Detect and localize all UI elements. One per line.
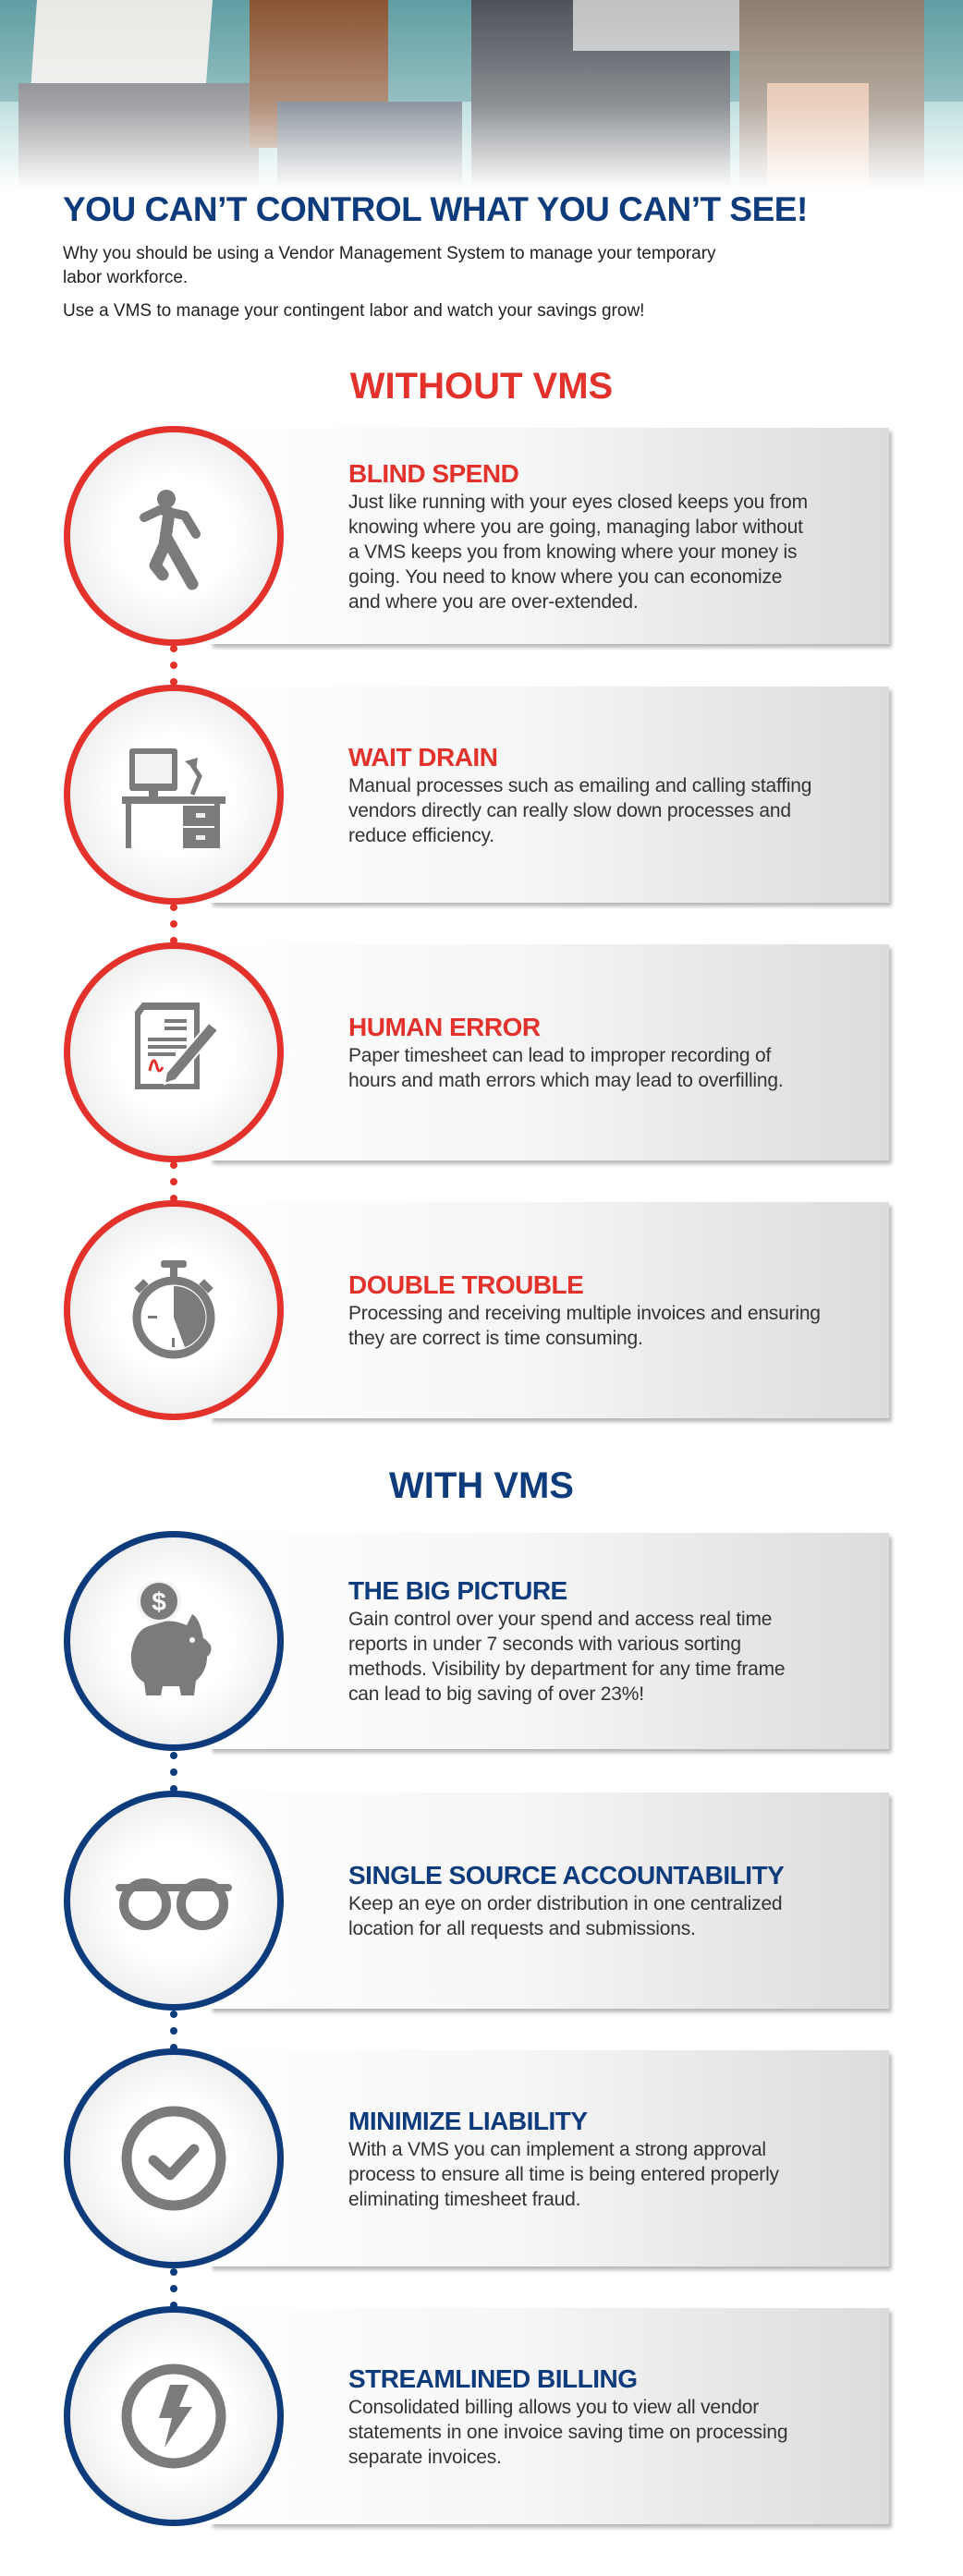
panel: big picture: can lead to big saving of over 23%! xyxy=(348,1683,644,1705)
panel: wait drain: reduce efficiency. xyxy=(348,824,494,846)
panel: minimize liability xyxy=(210,2050,889,2266)
header photo xyxy=(0,0,963,183)
panel: double trouble: DOUBLE TROUBLE xyxy=(348,1270,583,1299)
panel: double trouble xyxy=(210,1202,889,1418)
panel: blind spend: going. You need to know where you can economize xyxy=(348,565,782,588)
panel: streamlined billing: STREAMLINED BILLING xyxy=(348,2363,638,2393)
connector dots xyxy=(170,904,177,942)
panel: minimize liability: With a VMS you can implement a strong approval xyxy=(348,2138,766,2160)
connector dots xyxy=(170,1752,177,1791)
title: YOU CAN’T CONTROL WHAT YOU CAN’T SEE! xyxy=(63,190,808,228)
panel: minimize liability: eliminating timesheet fraud. xyxy=(348,2188,580,2210)
heading: with VMS: WITH VMS xyxy=(389,1465,574,1506)
icon: lightning circle xyxy=(64,2306,284,2526)
connector dots xyxy=(170,2011,177,2049)
icon: desk xyxy=(64,685,284,905)
panel: wait drain: WAIT DRAIN xyxy=(348,743,497,771)
panel: big picture: Gain control over your spend and access real time xyxy=(348,1609,772,1630)
panel: double trouble: Processing and receiving multiple invoices and ensuring xyxy=(348,1303,821,1324)
panel: human error: HUMAN ERROR xyxy=(348,1013,541,1041)
intro text: Use a VMS to manage your contingent labor and watch your savings grow! xyxy=(63,301,644,321)
panel: blind spend xyxy=(210,428,889,644)
panel: streamlined billing: statements in one invoice saving time on processing xyxy=(348,2421,787,2443)
panel: blind spend: and where you are over-extended. xyxy=(348,591,638,612)
panel: wait drain: vendors directly can really slow down processes and xyxy=(348,800,791,820)
panel: human error: Paper timesheet can lead to improper recording of xyxy=(348,1045,771,1066)
panel: big picture: methods. Visibility by department for any time frame xyxy=(348,1659,785,1680)
panel: big picture: THE BIG PICTURE xyxy=(348,1576,567,1605)
panel: wait drain: Manual processes such as emailing and calling staffing xyxy=(348,774,811,796)
panel: big picture xyxy=(210,1533,889,1749)
panel: double trouble: they are correct is time consuming. xyxy=(348,1328,643,1349)
heading: without VMS: WITHOUT VMS xyxy=(350,366,613,407)
icon: stopwatch xyxy=(64,1200,284,1420)
intro text: labor workforce. xyxy=(63,268,188,287)
panel: blind spend: BLIND SPEND xyxy=(348,458,518,488)
panel: big picture: reports in under 7 seconds with various sorting xyxy=(348,1634,741,1655)
connector dots xyxy=(170,645,177,686)
icon: check circle xyxy=(64,2048,284,2268)
icon: glasses xyxy=(64,1791,284,2011)
panel: single source: location for all requests and submissions. xyxy=(348,1918,696,1939)
connector dots xyxy=(170,2268,177,2306)
icon: piggy bank: $ xyxy=(152,1587,166,1616)
icon: running man xyxy=(64,426,284,646)
panel: minimize liability: MINIMIZE LIABILITY xyxy=(348,2107,588,2134)
connector dots xyxy=(170,1162,177,1201)
panel: blind spend: a VMS keeps you from knowing where your money is xyxy=(348,541,797,562)
panel: streamlined billing xyxy=(210,2308,889,2524)
panel: single source xyxy=(210,1792,889,2009)
icon: piggy bank xyxy=(64,1531,284,1751)
panel: single source: Keep an eye on order distribution in one centralized xyxy=(348,1893,782,1914)
panel: single source: SINGLE SOURCE ACCOUNTABILITY xyxy=(348,1861,784,1889)
panel: human error xyxy=(210,944,889,1160)
panel: blind spend: knowing where you are going, managing labor without xyxy=(348,516,803,538)
panel: wait drain xyxy=(210,687,889,903)
panel: minimize liability: process to ensure all time is being entered properly xyxy=(348,2164,779,2184)
intro text xyxy=(63,244,716,321)
panel: streamlined billing: separate invoices. xyxy=(348,2447,502,2467)
panel: human error: hours and math errors which may lead to overfilling. xyxy=(348,1070,784,1091)
icon: signed document xyxy=(64,942,284,1162)
panel: streamlined billing: Consolidated billing allows you to view all vendor xyxy=(348,2397,759,2417)
intro text: Why you should be using a Vendor Management System to manage your temporary xyxy=(63,244,716,263)
panel: blind spend: Just like running with your eyes closed keeps you from xyxy=(348,492,808,512)
